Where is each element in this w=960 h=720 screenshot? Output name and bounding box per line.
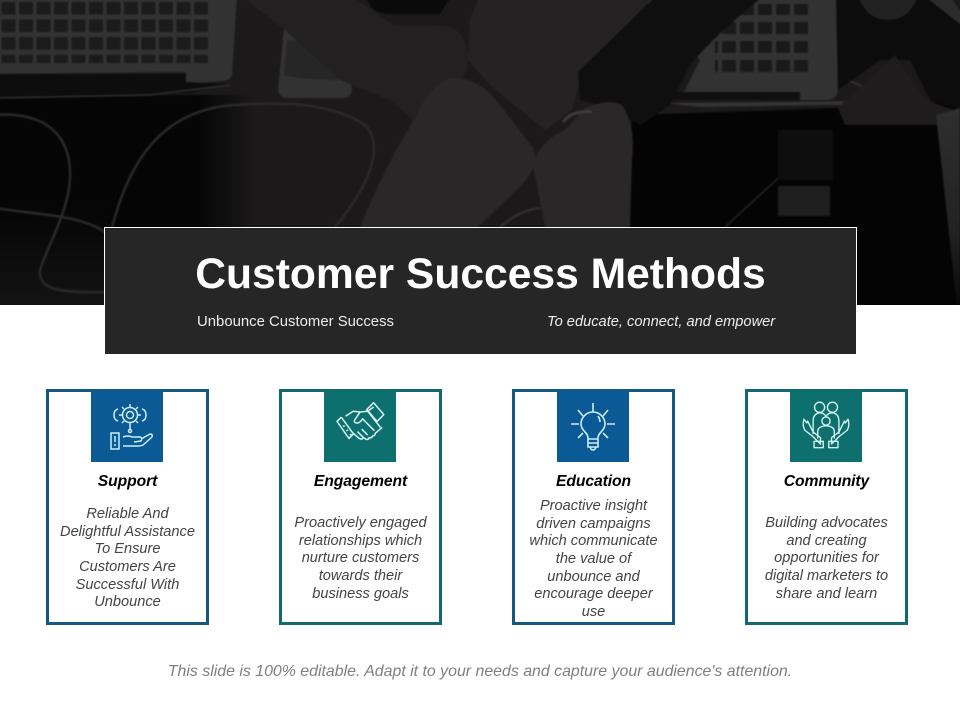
footer note: This slide is 100% editable. Adapt it to your needs and capture your audience's attention.	[168, 663, 792, 680]
description: towards their	[319, 568, 402, 584]
description: unbounce and	[547, 569, 640, 585]
description: and creating	[786, 533, 867, 549]
description: Delightful Assistance	[60, 524, 195, 540]
description	[529, 498, 658, 620]
right laptop	[548, 0, 838, 100]
hands	[240, 0, 468, 122]
heading: Community	[784, 473, 869, 490]
description	[60, 506, 195, 610]
icon: light bulb	[557, 391, 629, 462]
description: To Ensure	[94, 541, 160, 557]
card: education	[512, 389, 675, 625]
card: community	[745, 389, 908, 625]
description: relationships which	[299, 533, 422, 549]
description: share and learn	[776, 586, 877, 602]
title panel	[104, 227, 857, 354]
icon: support gear and hand	[91, 391, 163, 462]
description: encourage deeper	[534, 586, 653, 602]
laptop left	[0, 0, 237, 84]
description: Successful With	[76, 577, 179, 593]
description: Proactively engaged	[294, 515, 427, 531]
description: driven campaigns	[536, 516, 651, 532]
description: the value of	[556, 551, 631, 567]
title: Customer Success Methods	[195, 250, 766, 298]
description: use	[582, 604, 605, 620]
heading: Support	[98, 473, 157, 490]
card: support	[46, 389, 209, 625]
description	[765, 515, 888, 602]
heading: Engagement	[314, 473, 407, 490]
description: business goals	[312, 586, 409, 602]
description: opportunities for	[774, 550, 879, 566]
description: Proactive insight	[540, 498, 647, 514]
description: Unbounce	[94, 594, 161, 610]
description: Customers Are	[79, 559, 176, 575]
cables	[0, 104, 374, 292]
description: which communicate	[529, 533, 658, 549]
description: Reliable And	[86, 506, 169, 522]
background photo: hands over laptops	[0, 0, 960, 305]
description: digital marketers to	[765, 568, 888, 584]
icon: handshake	[324, 391, 396, 462]
heading: Education	[556, 473, 631, 490]
description	[294, 515, 427, 602]
left subtitle: Unbounce Customer Success	[197, 314, 394, 330]
card: engagement	[279, 389, 442, 625]
icon: people in hands	[790, 391, 862, 462]
right subtitle: To educate, connect, and empower	[547, 314, 775, 330]
description: Building advocates	[765, 515, 888, 531]
description: nurture customers	[302, 550, 419, 566]
dark lower right	[625, 100, 960, 315]
phone	[278, 28, 352, 98]
